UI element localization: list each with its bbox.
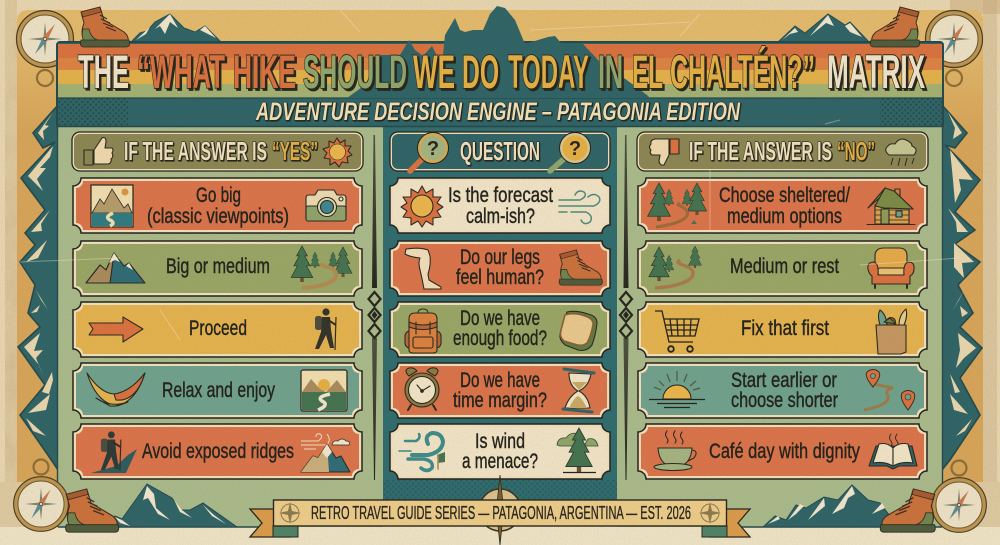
icon: hammock [87,373,145,406]
row: relax and enjoy [73,363,362,418]
icon: hiker [315,308,336,350]
icon: mountain river picture [91,185,133,227]
icon: camera [306,190,346,221]
icon: strong wind [399,433,445,470]
bottom mountains [102,484,900,527]
title: TODAY [508,45,589,98]
bottom corner compasses and boots [14,460,986,532]
icon: trees and trail [291,246,352,288]
header: yes: “YES” [272,136,318,166]
row: go big [73,178,362,233]
icon: map pins and route [864,370,915,410]
row: fix that first [638,302,927,357]
Chaltén massif silhouette [347,6,650,98]
row: forecast [390,178,610,233]
header: yes: IF THE ANSWER IS [124,136,267,166]
icon: alarm clock [405,368,439,410]
text: time: time margin? [453,389,547,412]
row: legs [390,241,610,296]
column: if the answer is yes [72,132,363,479]
footer compass rose [467,475,533,545]
text: fix that first: Fix that first [741,317,829,340]
icon: valley picture [301,370,347,411]
icon: trees and trail [648,183,707,227]
header: question: ? [427,138,439,160]
column: question [390,132,610,479]
main framed panel with sunset stripes [57,42,943,128]
icon: trees and trail [649,246,702,288]
row: sheltered [638,178,927,233]
text: food: Do we have [460,307,540,330]
row: avoid exposed ridges [73,424,362,479]
text: go big [147,184,289,228]
text: forecast: calm-ish? [466,205,535,228]
icon: leg [405,248,441,289]
footer ribbon banner [250,500,750,537]
text: big or medium: Big or medium [166,255,270,278]
text: legs: feel human? [456,266,544,289]
text: start earlier [731,369,838,412]
title: WE [413,45,455,98]
header: no: “NO” [837,136,875,166]
footer text: RETRO TRAVEL GUIDE SERIES — PATAGONIA, ARGENTINA — EST. 2026 [311,502,691,523]
text: start earlier: Start earlier or [731,369,837,392]
text: medium or rest: Medium or rest [730,255,839,278]
text: food [453,307,547,350]
text: go big: (classic viewpoints) [147,205,289,228]
icon: shopping cart [655,311,699,352]
text: time: Do we have [460,369,540,392]
header: no [637,132,928,171]
title: DO [462,45,499,98]
header: question: ? [569,138,581,160]
icon: tree and clouds [557,428,598,472]
row: proceed [73,302,362,357]
text: cafe day: Café day with dignity [709,440,860,463]
text: wind [462,430,538,473]
top hiking boots [80,7,920,47]
icon: windy peak [301,434,350,472]
header: no: IF THE ANSWER IS [689,136,832,166]
row: food [390,302,610,357]
text: time [453,369,547,412]
title: “WHAT [137,45,225,98]
header: question: QUESTION [460,136,540,166]
icon: sun [401,186,443,227]
icon: armchair [868,248,914,288]
text: sheltered: Choose sheltered/ [719,184,850,207]
header: yes [72,132,363,171]
icon: arrow [89,317,143,342]
row: wind [390,424,610,479]
column backgrounds [58,126,942,527]
text: forecast [448,184,553,228]
icon: mountain [86,253,145,283]
column dividers [368,135,632,480]
text: proceed: Proceed [189,317,247,340]
title: MATRIX [827,45,925,98]
icon: hiker on ridge [91,431,137,473]
title: THE [78,45,129,98]
icon: coffee cup [654,431,696,470]
text: wind: a menace? [462,450,538,473]
title [78,45,925,98]
subtitle: ADVENTURE DECISION ENGINE – PATAGONIA EDITION [255,98,741,126]
text: legs: Do our legs [460,246,540,269]
row: big or medium [73,241,362,296]
title: EL [632,45,663,98]
text: sheltered: medium options [727,205,842,228]
title: SHOULD [303,45,407,98]
row: medium or rest [638,241,927,296]
icon: open book [869,434,917,469]
icon: sunrise [649,371,705,408]
title: CHALTÉN?” [670,45,815,98]
icon: boot [559,250,602,285]
row: time [390,363,610,418]
corner compasses [16,10,982,86]
title: IN [598,45,623,98]
text: legs [456,246,544,289]
icon: hourglass [563,369,594,412]
column: if the answer is no [637,132,928,479]
text: food: enough food? [453,327,547,350]
text: start earlier: choose shorter [731,389,838,412]
text: forecast: Is the forecast [448,184,553,207]
text: go big: Go big [196,184,241,207]
side mountain borders [18,105,982,470]
icon: grocery bag [876,309,907,354]
text: relax and enjoy: Relax and enjoy [162,379,275,402]
row: start earlier [638,363,927,418]
title: HIKE [233,45,296,98]
text: wind: Is wind [475,430,525,453]
header: question [390,132,610,171]
icon: cabin [867,188,915,224]
row: cafe day [638,424,927,479]
icon: wind [559,191,600,224]
text: avoid exposed ridges: Avoid exposed ridges [142,440,294,463]
icon: backpack [405,309,441,353]
icon: sandwich [560,311,597,350]
text: sheltered [719,184,850,228]
top corner mountains [130,14,870,43]
